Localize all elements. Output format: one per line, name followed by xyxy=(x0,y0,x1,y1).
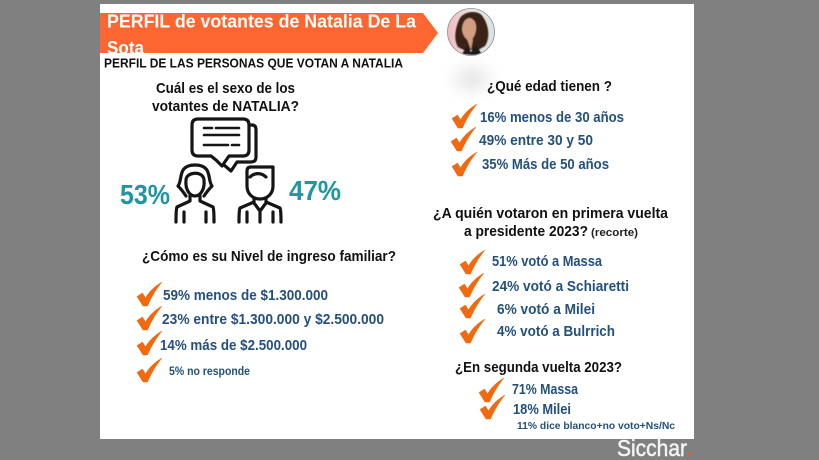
heading: age question: ¿Qué edad tienen ? xyxy=(487,78,612,95)
panel: age xyxy=(451,78,624,176)
list: age items: 16% menos de 30 años xyxy=(480,109,624,126)
subtitle: PERFIL DE LAS PERSONAS QUE VOTAN A NATALIA xyxy=(104,56,403,70)
list: age items: 35% Más de 50 años xyxy=(482,156,609,173)
icon: two people talking xyxy=(176,119,281,222)
list: income items: 59% menos de $1.300.000 xyxy=(163,287,328,304)
list: first round items: 6% votó a Milei xyxy=(497,301,595,318)
heading: first round question: (recorte) xyxy=(591,227,638,239)
list: income items: 5% no responde xyxy=(169,366,250,378)
list: first round items: 4% votó a Bulrrich xyxy=(497,323,615,340)
stat: 53 percent: 53% xyxy=(120,179,170,210)
heading: sex question xyxy=(152,80,299,115)
icon: portrait photo of Natalia xyxy=(448,8,494,56)
list: second round items: 71% Massa xyxy=(512,381,579,398)
heading: second round question: ¿En segunda vuelta 2023? xyxy=(455,359,622,376)
heading: first round question: a presidente 2023? xyxy=(464,223,588,240)
panel: first round vote xyxy=(433,205,669,343)
panel: white slide xyxy=(100,4,694,439)
list: age items: 49% entre 30 y 50 xyxy=(479,132,593,149)
list: first round items: 24% votó a Schiaretti xyxy=(492,278,629,295)
title banner xyxy=(100,13,438,53)
heading: sex question: Cuál es el sexo de los xyxy=(156,80,295,97)
list: second round items xyxy=(479,378,675,432)
heading: income question: ¿Cómo es su Nivel de ingreso familiar? xyxy=(142,248,396,265)
panel: sex of voters xyxy=(120,80,341,222)
list: second round items: 11% dice blanco+no voto+Ns/Nc xyxy=(517,420,675,432)
list: second round items: 18% Milei xyxy=(513,401,571,418)
panel: second round vote xyxy=(455,359,675,432)
heading: first round question xyxy=(433,205,669,240)
panel: family income xyxy=(137,248,396,382)
list: first round items xyxy=(459,250,629,343)
title text xyxy=(108,14,416,53)
title text: PERFIL de votantes de Natalia De La xyxy=(107,12,417,32)
list: income items: 23% entre $1.300.000 y $2.500.000 xyxy=(162,311,384,328)
list: income items xyxy=(137,282,384,382)
list: first round items: 51% votó a Massa xyxy=(492,253,603,270)
title text: Sota xyxy=(107,38,145,58)
blurred shadow patch xyxy=(455,68,489,90)
list: income items: 14% más de $2.500.000 xyxy=(160,337,307,354)
heading: first round question: ¿A quién votaron en primera vuelta xyxy=(433,205,669,222)
stat: 47 percent: 47% xyxy=(289,175,341,206)
list: age items xyxy=(451,104,624,176)
heading: sex question: votantes de NATALIA? xyxy=(152,98,299,115)
